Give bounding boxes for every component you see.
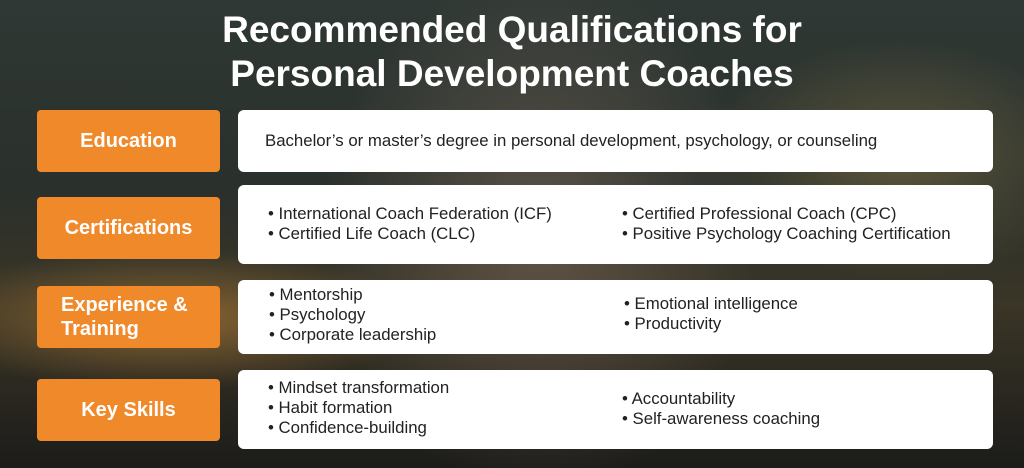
list: experience right: • Emotional intelligence bbox=[624, 294, 798, 313]
list: experience left bbox=[269, 285, 436, 344]
list: skills right bbox=[622, 389, 820, 428]
label: certifications bbox=[37, 197, 220, 259]
list: skills left: • Habit formation bbox=[268, 398, 392, 417]
title: Personal Development Coaches bbox=[230, 53, 794, 94]
list: skills left: • Confidence-building bbox=[268, 418, 427, 437]
list: skills right: • Accountability bbox=[622, 389, 735, 408]
list: experience left: • Mentorship bbox=[269, 285, 363, 304]
label: experience: Training bbox=[61, 318, 139, 340]
list: certifications right bbox=[622, 204, 951, 243]
list: experience left: • Psychology bbox=[269, 305, 365, 324]
panel: key skills bbox=[238, 370, 993, 449]
label: experience bbox=[37, 286, 220, 348]
list: skills right: • Self-awareness coaching bbox=[622, 409, 820, 428]
list: certifications left bbox=[268, 204, 552, 243]
list: certifications right: • Positive Psychology Coaching Certification bbox=[622, 224, 951, 243]
list: experience right: • Productivity bbox=[624, 314, 721, 333]
list: skills left bbox=[268, 378, 449, 437]
label: education bbox=[37, 110, 220, 172]
panel: education bbox=[238, 110, 993, 172]
list: experience right bbox=[624, 294, 798, 333]
label: key skills bbox=[37, 379, 220, 441]
title bbox=[222, 9, 802, 94]
label: experience: Experience & bbox=[61, 294, 188, 316]
panel: certifications bbox=[238, 185, 993, 264]
list: certifications right: • Certified Professional Coach (CPC) bbox=[622, 204, 896, 223]
panel: experience bbox=[238, 280, 993, 354]
list: skills left: • Mindset transformation bbox=[268, 378, 449, 397]
title: Recommended Qualifications for bbox=[222, 9, 802, 50]
list: certifications left: • Certified Life Coach (CLC) bbox=[268, 224, 475, 243]
list: certifications left: • International Coach Federation (ICF) bbox=[268, 204, 552, 223]
label: certifications: Certifications bbox=[65, 217, 192, 239]
list: experience left: • Corporate leadership bbox=[269, 325, 436, 344]
label: education: Education bbox=[80, 130, 177, 152]
label: key skills: Key Skills bbox=[81, 399, 176, 421]
panel: education: Bachelor’s or master’s degree in personal development, psychology, or counseling bbox=[265, 131, 877, 150]
